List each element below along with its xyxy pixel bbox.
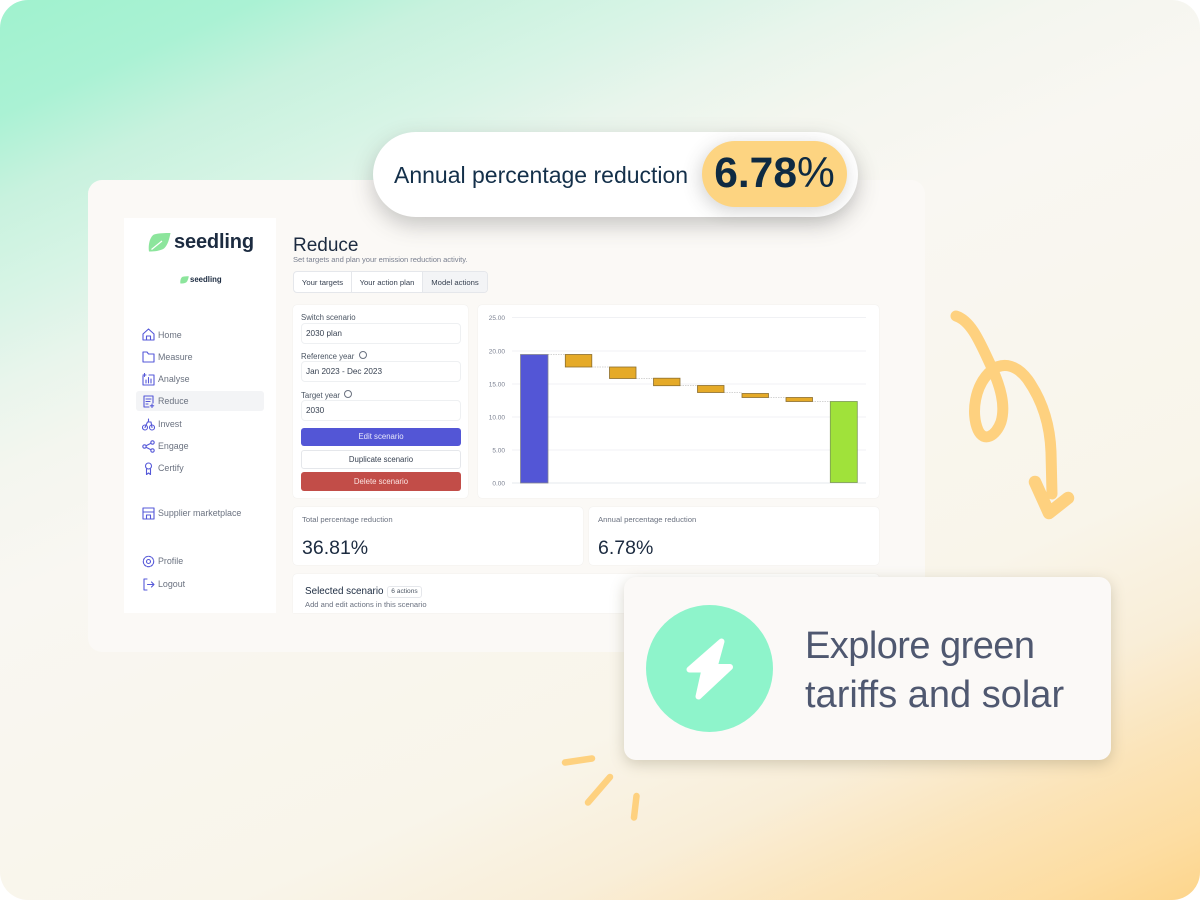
- label: reference year: Reference year: [301, 352, 354, 361]
- button: duplicate scenario: [301, 450, 461, 469]
- input: reference year: [301, 361, 461, 382]
- input: reference year: Jan 2023 - Dec 2023: [306, 367, 382, 376]
- stat card: annual percentage reduction: 6.78%: [598, 537, 653, 559]
- input: switch scenario: [301, 323, 461, 344]
- tabs: Model actions: [431, 278, 479, 287]
- nav item: certify: Certify: [158, 463, 184, 473]
- panel: waterfall chart: [478, 305, 879, 498]
- stat card: total percentage reduction: [293, 507, 583, 565]
- panel: sidebar: [124, 218, 276, 613]
- nav item: reduce: Reduce: [158, 396, 189, 406]
- heading: reduce: Reduce: [293, 235, 358, 256]
- pill label: Annual percentage reduction: [394, 162, 688, 188]
- input: target year: 2030: [306, 406, 324, 415]
- nav item: invest: Invest: [158, 419, 182, 429]
- button: edit scenario: Edit scenario: [358, 432, 404, 441]
- panel: app window: [88, 180, 925, 652]
- nav highlight: reduce: [136, 391, 264, 411]
- nav item: reduce: [143, 396, 189, 408]
- panel: selected scenario: Selected scenario: [305, 586, 384, 597]
- tabs: [293, 271, 488, 293]
- input: switch scenario: 2030 plan: [306, 329, 342, 338]
- nav item: certify: [145, 462, 184, 475]
- button: delete scenario: Delete scenario: [354, 477, 408, 486]
- button: delete scenario: [301, 472, 461, 491]
- nav item: supplier marketplace: Supplier marketplace: [158, 508, 241, 518]
- panel: selected scenario: 6 actions: [391, 588, 418, 595]
- waterfall chart: 0.00: [492, 480, 505, 488]
- stat card: total percentage reduction: 36.81%: [302, 537, 368, 559]
- logo: seedling small: seedling: [190, 275, 222, 284]
- panel: scenario form: [293, 305, 468, 498]
- nav item: logout: Logout: [158, 579, 185, 589]
- tabs: Your targets: [302, 278, 343, 287]
- input: target year: [301, 400, 461, 421]
- nav item: engage: Engage: [158, 441, 189, 451]
- callout: green tariffs card: [624, 577, 1111, 760]
- waterfall chart: 20.00: [489, 348, 505, 356]
- callout text: tariffs and solar: [805, 674, 1064, 716]
- panel: selected scenario: [293, 574, 879, 613]
- waterfall chart: [489, 315, 866, 488]
- icon: lightning bolt: [646, 605, 773, 732]
- nav item: profile: [142, 556, 183, 568]
- panel: selected scenario: Add and edit actions in this scenario: [305, 600, 427, 609]
- logo: seedling large: seedling: [174, 231, 254, 253]
- label: target year: [301, 390, 352, 400]
- pill value: [702, 141, 847, 207]
- nav item: home: [142, 328, 182, 340]
- nav item: engage: [142, 440, 189, 453]
- button: edit scenario: [301, 428, 461, 446]
- pill value: 6.78%: [714, 150, 835, 197]
- stat card: annual percentage reduction: [589, 507, 879, 565]
- callout text: Explore green: [805, 625, 1034, 667]
- nav item: supplier marketplace: [142, 508, 241, 520]
- waterfall chart: 25.00: [489, 315, 505, 322]
- nav item: analyse: [142, 373, 190, 386]
- nav item: logout: [143, 578, 185, 590]
- label: target year: Target year: [301, 391, 340, 400]
- waterfall chart: 5.00: [492, 448, 505, 454]
- button: duplicate scenario: Duplicate scenario: [349, 455, 413, 464]
- callout: annual percentage reduction pill: [373, 132, 858, 217]
- subheading: Set targets and plan your emission reduction activity.: [293, 255, 467, 264]
- waterfall chart: 15.00: [489, 382, 505, 388]
- arrow: hand-drawn curl: [950, 310, 1074, 520]
- decoration: spark lines: [562, 755, 640, 821]
- label: switch scenario: Switch scenario: [301, 313, 356, 322]
- stat card: total percentage reduction: Total percentage reduction: [302, 515, 393, 524]
- nav item: home: Home: [158, 330, 182, 340]
- callout text: [805, 625, 1064, 716]
- nav item: profile: Profile: [158, 556, 183, 566]
- waterfall chart: 10.00: [489, 414, 505, 422]
- nav item: measure: Measure: [158, 352, 193, 362]
- nav item: analyse: Analyse: [158, 374, 190, 384]
- nav item: invest: [142, 418, 182, 430]
- nav item: measure: [142, 352, 193, 362]
- tabs: Your action plan: [360, 278, 414, 287]
- stat card: annual percentage reduction: Annual percentage reduction: [598, 515, 696, 524]
